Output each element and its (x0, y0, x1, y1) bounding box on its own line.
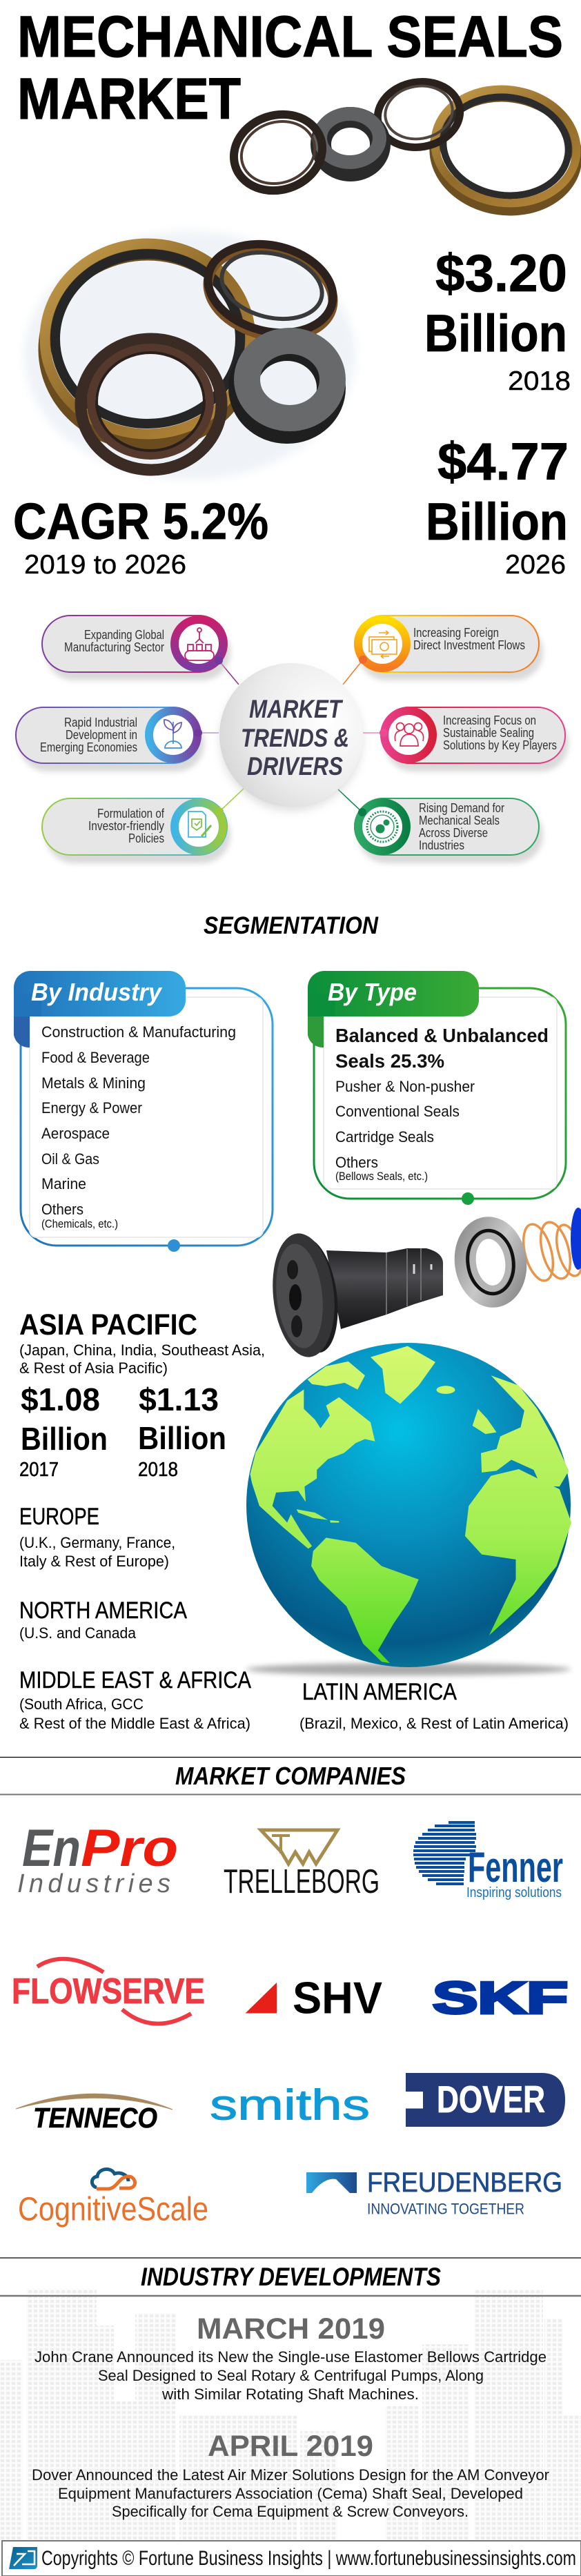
panel: by industry: By Industry (31, 978, 163, 1006)
driver: Rising Demand for Mechanical Seals: Industries (419, 838, 464, 852)
photo: mechanical seal shaft (267, 1230, 443, 1360)
region: asia pacific: $1.08 (21, 1382, 100, 1417)
driver: Formulation of Investor-friendly Policies: Formulation of (97, 807, 165, 820)
photo: bearing and springs (459, 1208, 581, 1302)
panel: by type: Cartridge Seals (335, 1128, 434, 1146)
stat: CAGR (13, 493, 268, 580)
land: caribbean islands (297, 1509, 339, 1523)
driver: Increasing Foreign Direct Investment Flows (355, 616, 543, 680)
driver: Increasing Focus on Sustainable Sealing Solutions (380, 707, 569, 771)
icon: plant growing from coin (164, 720, 181, 748)
icon: policy document (188, 812, 211, 837)
panel: by industry: (Chemicals, etc.) (41, 1217, 118, 1230)
development: April 2019 (32, 2430, 549, 2520)
logo: Dover (406, 2073, 565, 2127)
photo: large seal rings (24, 231, 355, 480)
center hub: market trends and drivers: DRIVERS (247, 752, 343, 780)
stat: 2018 market value: $3.20 (435, 244, 567, 303)
logo: Fenner: Inspiring solutions (466, 1885, 562, 1900)
panel: by type: Others (335, 1154, 378, 1171)
logo: Smiths: smiths (210, 2081, 370, 2130)
logo: Tenneco: TENNECO (33, 2102, 157, 2134)
region: middle east and africa: & Rest of the Middle East & Africa) (19, 1715, 250, 1732)
logo: Trelleborg (224, 1830, 380, 1900)
development: March 2019: Seal Designed to Seal Rotary & Centrifugal Pumps, Along (98, 2367, 484, 2384)
region: asia pacific: & Rest of Asia Pacific) (19, 1359, 168, 1377)
land: greenland (371, 1346, 435, 1404)
logo: SHV: SHV (293, 1972, 382, 2023)
logo: Flowserve: FLOWSERVE (12, 1972, 205, 2012)
region: europe: (U.K., Germany, France, (19, 1534, 175, 1551)
driver: Rising Demand for Mechanical Seals: Across Diverse (419, 826, 488, 840)
panel: by industry (14, 971, 273, 1252)
stat: 2026 market value: $4.77 (437, 433, 569, 491)
land: iceland (437, 1386, 455, 1394)
driver: Increasing Focus on Sustainable Sealing Solutions: Sustainable Sealing (443, 726, 534, 740)
panel: by industry: Marine (41, 1175, 86, 1192)
logo: CognitiveScale: CognitiveScale (18, 2192, 208, 2228)
region: europe: EUROPE (19, 1504, 99, 1530)
development: March 2019: with Similar Rotating Shaft Machines. (161, 2386, 419, 2403)
region: latin america: LATIN AMERICA (302, 1679, 457, 1705)
panel: by industry: Metals & Mining (41, 1074, 146, 1092)
land: europe (481, 1375, 569, 1486)
region: asia pacific: Billion (21, 1421, 108, 1457)
logo: EnPro Industries (17, 1819, 178, 1898)
driver: Increasing Focus on Sustainable Sealing Solutions: Solutions by Key Players (443, 738, 557, 752)
development: April 2019: Specifically for Cema Equipment & Screw Conveyors. (112, 2503, 469, 2520)
panel: by industry: Aerospace (41, 1125, 110, 1142)
driver: Rising Demand for Mechanical Seals: Mechanical Seals (419, 814, 500, 827)
logo: Fenner (413, 1822, 563, 1900)
logo: Freudenberg: FREUDENBERG (367, 2167, 562, 2198)
development: March 2019 (35, 2312, 546, 2403)
heading: industry developments: INDUSTRY DEVELOPMENTS (141, 2263, 441, 2291)
land: africa (465, 1469, 571, 1635)
region: europe: Italy & Rest of Europe) (19, 1553, 169, 1570)
title: MARKET (17, 66, 241, 131)
icon: group of people (395, 723, 424, 746)
panel: by type: Balanced & Unbalanced (335, 1025, 549, 1046)
region: asia pacific: 2018 (138, 1459, 178, 1481)
stat: CAGR: 2019 to 2026 (24, 550, 186, 580)
logo: SHV (246, 1972, 382, 2023)
development: March 2019: John Crane Announced its New the Single-use Elastomer Bellows Cartridge (35, 2348, 546, 2366)
icon: banknotes (369, 631, 397, 658)
logo: SKF: SKF (433, 1972, 568, 2023)
logo: EnPro Industries: En (22, 1819, 81, 1878)
land: arctic islands (308, 1361, 365, 1390)
connector lines: drivers (198, 660, 384, 812)
heading: segmentation: SEGMENTATION (204, 912, 379, 939)
driver: Expanding Global Manufacturing Sector: Manufacturing Sector (64, 640, 164, 654)
land: south america (311, 1537, 419, 1663)
driver: Formulation of Investor-friendly Policies: Investor-friendly (88, 819, 164, 833)
region: north america: (U.S. and Canada (19, 1624, 137, 1642)
region: europe (19, 1504, 175, 1570)
region: asia pacific: (Japan, China, India, Southeast Asia, (19, 1341, 265, 1359)
panel: by industry: Construction & Manufacturing (41, 1023, 236, 1041)
land: british isles (473, 1409, 497, 1434)
stat: CAGR: CAGR 5.2% (13, 493, 268, 550)
logo: Freudenberg (306, 2167, 562, 2218)
panel: by type (308, 971, 566, 1205)
driver: Increasing Focus on Sustainable Sealing Solutions: Increasing Focus on (443, 714, 536, 727)
region: asia pacific: Billion (138, 1420, 226, 1456)
globe (246, 1343, 571, 1675)
driver: Rapid Industrial Development in Emerging Economies: Development in (66, 728, 137, 742)
driver: Rapid Industrial Development in Emerging Economies (16, 707, 204, 771)
logo: EnPro Industries: Pro (81, 1819, 178, 1878)
logo: Freudenberg: INNOVATING TOGETHER (367, 2200, 524, 2218)
panel: by industry: Oil & Gas (41, 1150, 99, 1168)
driver: Increasing Foreign Direct Investment Flows: Direct Investment Flows (413, 638, 525, 652)
panel: by type: Pusher & Non-pusher (335, 1078, 475, 1095)
stat: 2018 market value (424, 244, 571, 396)
footer (2, 2541, 581, 2576)
region: asia pacific: $1.13 (139, 1382, 219, 1417)
driver: Rising Demand for Mechanical Seals (355, 798, 543, 863)
logo: Dover: DOVER (437, 2078, 545, 2121)
driver: Rapid Industrial Development in Emerging Economies: Rapid Industrial (64, 716, 137, 729)
region: middle east and africa: (South Africa, GCC (19, 1695, 144, 1713)
region: latin america: (Brazil, Mexico, & Rest of Latin America) (299, 1715, 569, 1732)
driver: Formulation of Investor-friendly Policies: Policies (128, 832, 164, 845)
logo: EnPro Industries: Industries (17, 1869, 170, 1898)
driver: Increasing Foreign Direct Investment Flows: Increasing Foreign (413, 626, 499, 640)
region: asia pacific: 2017 (19, 1459, 59, 1481)
stat: 2018 market value: 2018 (508, 366, 571, 396)
stat: 2026 market value (426, 433, 569, 580)
stat: 2026 market value: 2026 (505, 550, 566, 580)
logo: Flowserve (12, 1959, 205, 2024)
driver: Rising Demand for Mechanical Seals: Rising Demand for (419, 801, 504, 815)
photo: small seal rings row (224, 75, 581, 219)
driver: Rapid Industrial Development in Emerging Economies: Emerging Economies (40, 740, 137, 754)
panel: by type: Conventional Seals (335, 1103, 460, 1120)
panel: by type: (Bellows Seals, etc.) (335, 1170, 428, 1183)
logo: Trelleborg: TRELLEBORG (224, 1863, 380, 1900)
panel: by type: By Type (328, 978, 417, 1006)
driver: Expanding Global Manufacturing Sector (42, 616, 230, 680)
region: north america: NORTH AMERICA (19, 1597, 187, 1624)
driver: Formulation of Investor-friendly Policies (42, 798, 230, 863)
region: north america (19, 1597, 187, 1642)
logo: CognitiveScale (18, 2169, 208, 2228)
development: April 2019: Dover Announced the Latest Air Mizer Solutions Design for the AM Conveyor (32, 2466, 549, 2484)
stat: 2018 market value: Billion (424, 304, 567, 363)
icon: Fortune Business Insights logo (9, 2547, 37, 2569)
icon: gears badge (367, 812, 397, 842)
region: middle east and africa (19, 1667, 251, 1732)
center hub: market trends and drivers: MARKET (249, 695, 344, 723)
panel: by type: Seals 25.3% (335, 1050, 444, 1072)
land: north and central america (250, 1390, 375, 1548)
driver: Expanding Global Manufacturing Sector: Expanding Global (84, 628, 164, 642)
region: asia pacific: ASIA PACIFIC (19, 1308, 197, 1341)
region: latin america (299, 1679, 569, 1732)
panel: by industry: Energy & Power (41, 1099, 142, 1117)
development: April 2019: Equipment Manufacturers Association (Cema) Shaft Seal, Developed (58, 2485, 523, 2502)
development: April 2019: APRIL 2019 (208, 2430, 373, 2463)
heading: market companies: MARKET COMPANIES (175, 1762, 406, 1790)
region: middle east and africa: MIDDLE EAST & AFRICA (19, 1667, 251, 1693)
panel: by industry: Others (41, 1201, 83, 1218)
icon: conveyor robot arm (185, 628, 214, 660)
development: March 2019: MARCH 2019 (197, 2312, 385, 2346)
region: asia pacific (19, 1308, 265, 1481)
center hub: market trends and drivers: TRENDS & (241, 724, 349, 752)
panel: by industry: Food & Beverage (41, 1049, 150, 1066)
center hub: market trends and drivers (219, 663, 363, 810)
title (17, 4, 563, 131)
